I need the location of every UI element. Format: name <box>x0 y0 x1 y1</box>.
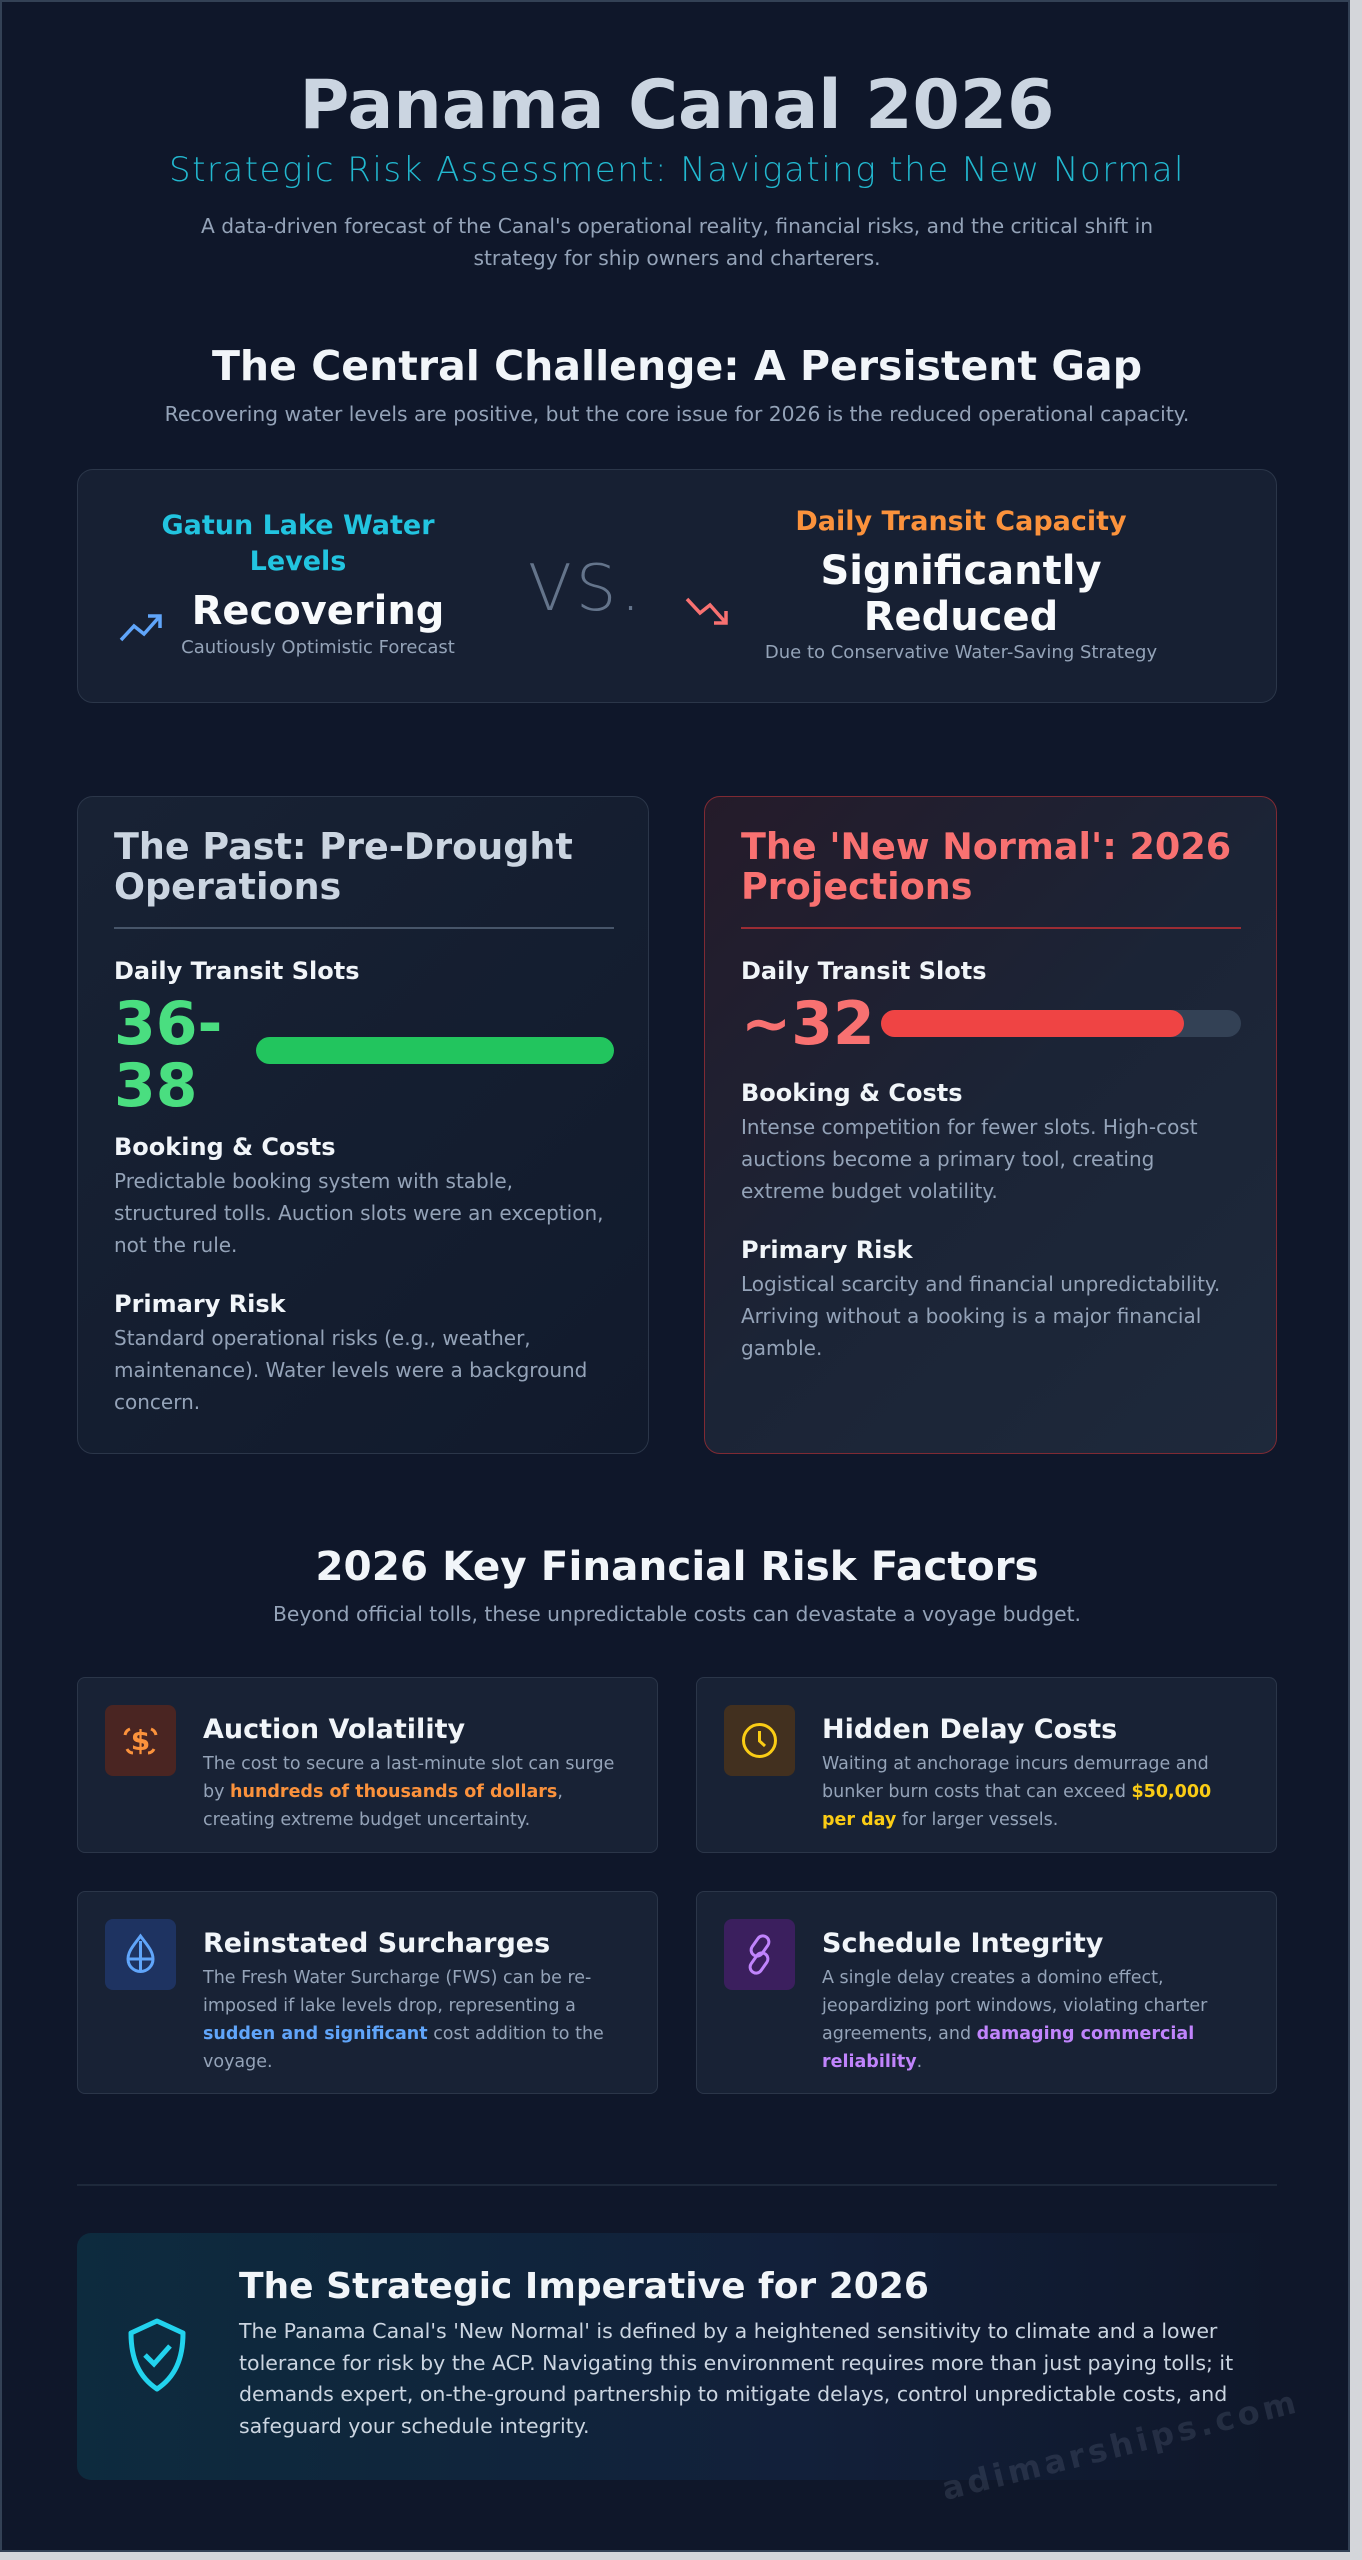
past slots value: 36- <box>114 989 222 1059</box>
capacity caption: Due to Conservative Water-Saving Strategy <box>765 642 1157 663</box>
watermark: adimarships.com <box>938 2382 1303 2508</box>
new slots value: ~32 <box>741 989 875 1059</box>
subtitle: Strategic Risk Assessment: Navigating the New Normal <box>169 150 1185 190</box>
vs: VS. <box>528 552 645 626</box>
icon: chain link <box>724 1919 795 1990</box>
panel: strategic imperative <box>77 2233 1277 2480</box>
surcharges text: The Fresh Water Surcharge (FWS) can be re-imposed if lake levels drop, representing a sudden and significant cost addition to the voyage. <box>203 1968 604 2072</box>
card: auction volatility <box>77 1677 658 1853</box>
capacity label: Daily Transit Capacity <box>795 506 1127 537</box>
intro text: A data-driven forecast of the Canal's operational reality, financial risks, and the critical shift in strategy for ship owners and charterers. <box>201 214 1153 270</box>
new booking: Booking & Costs <box>741 1079 963 1107</box>
past heading: The Past: Pre-Drought Operations <box>114 825 573 908</box>
new risk: Primary Risk <box>741 1236 913 1264</box>
imperative text: The Panama Canal's 'New Normal' is defined by a heightened sensitivity to climate and a lower tolerance for risk by the ACP. Navigating this environment requires more than just paying tolls; it demands expert, on-the-ground partnership to mitigate delays, control unpredictable costs, and safeguard your schedule integrity. <box>239 2319 1233 2438</box>
past risk: Standard operational risks (e.g., weather, maintenance). Water levels were a background concern. <box>114 1326 587 1414</box>
auction text: The cost to secure a last-minute slot can surge by hundreds of thousands of dollars, creating extreme budget uncertainty. <box>203 1754 614 1830</box>
card: delay costs <box>696 1677 1277 1853</box>
icon: clock <box>724 1705 795 1776</box>
icon: shield <box>128 2318 186 2392</box>
surcharges title: Reinstated Surcharges <box>203 1928 550 1959</box>
schedule text: A single delay creates a domino effect, jeopardizing port windows, violating charter agreements, and damaging commercial reliability. <box>822 1968 1207 2072</box>
auction title: Auction Volatility <box>203 1714 465 1745</box>
new heading: The 'New Normal': 2026 Projections <box>741 825 1231 908</box>
heading: risk factors: 2026 Key Financial Risk Factors <box>315 1542 1039 1590</box>
past booking: Booking & Costs <box>114 1133 336 1161</box>
past slots value: 38 <box>114 1051 198 1121</box>
new risk: Logistical scarcity and financial unpredictability. Arriving without a booking is a major financial gamble. <box>741 1272 1220 1360</box>
water levels label: Gatun Lake Water Levels <box>161 510 435 577</box>
recovering caption: Cautiously Optimistic Forecast <box>181 637 455 658</box>
past risk: Primary Risk <box>114 1290 286 1318</box>
panel: new normal <box>704 796 1277 1454</box>
title: Panama Canal 2026 <box>300 66 1054 145</box>
past slots value <box>114 989 222 1121</box>
new slots label: Daily Transit Slots <box>741 957 987 985</box>
icon: water drop <box>105 1919 176 1990</box>
new bar <box>881 1010 1241 1037</box>
past slots label: Daily Transit Slots <box>114 957 360 985</box>
past booking: Predictable booking system with stable, structured tolls. Auction slots were an exception, not the rule. <box>114 1169 604 1257</box>
panel: past <box>77 796 649 1454</box>
delay text: Waiting at anchorage incurs demurrage and bunker burn costs that can exceed $50,000 per day for larger vessels. <box>822 1754 1211 1830</box>
heading: central challenge: The Central Challenge: A Persistent Gap <box>212 342 1142 390</box>
subheading: risk factors: Beyond official tolls, these unpredictable costs can devastate a voyage budget. <box>273 1602 1081 1626</box>
schedule title: Schedule Integrity <box>822 1928 1103 1959</box>
icon: trend up <box>120 614 162 642</box>
icon: money <box>105 1705 176 1776</box>
card: surcharges <box>77 1891 658 2094</box>
icon: money: $ <box>131 1724 150 1757</box>
panel: comparison <box>77 469 1277 703</box>
delay title: Hidden Delay Costs <box>822 1714 1117 1745</box>
recovering value: Recovering <box>192 588 444 634</box>
new booking: Intense competition for fewer slots. High-cost auctions become a primary tool, creating extreme budget volatility. <box>741 1115 1198 1203</box>
past bar <box>256 1037 614 1064</box>
icon: trend down <box>686 598 728 625</box>
imperative title: The Strategic Imperative for 2026 <box>239 2266 929 2307</box>
card: schedule <box>696 1891 1277 2094</box>
subheading: central challenge: Recovering water levels are positive, but the core issue for 2026 is the reduced operational capacity. <box>165 402 1189 426</box>
capacity value: Significantly Reduced <box>820 548 1102 640</box>
